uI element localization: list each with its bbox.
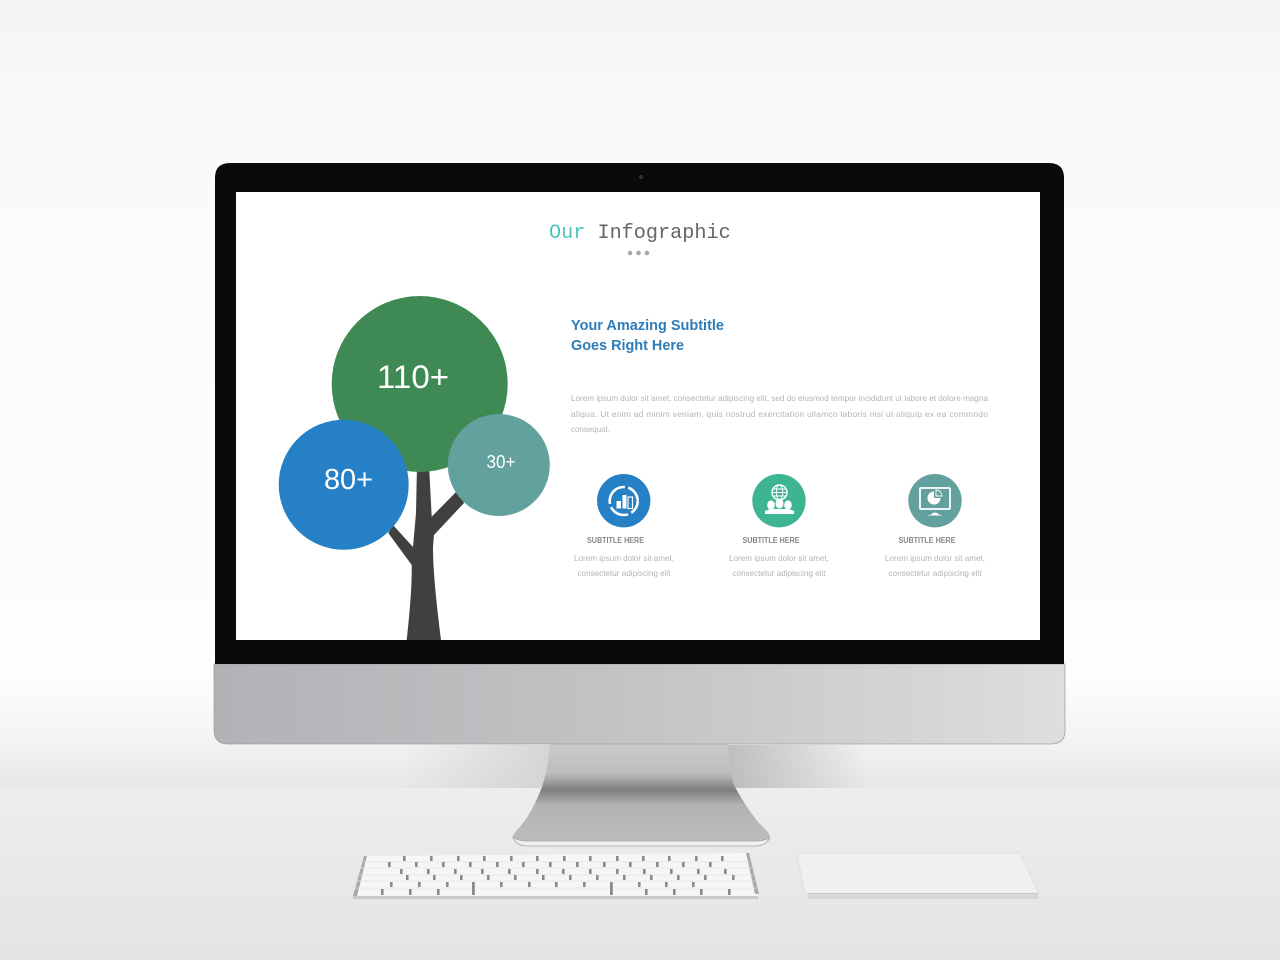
feature 3 text: Lorem ipsum dolor sit amet,: [885, 553, 985, 563]
feature 3 text: [885, 553, 985, 578]
body paragraph: aliqua. Ut enim ad minim veniam, quis nostrud exercitation ullamco laboris nisi ut aliquip ex ea commodo: [571, 409, 988, 419]
body paragraph: Lorem ipsum dolor sit amet, consectetur adipiscing elit, sed do eiusmod tempor incididunt ut labore et dolore magna: [571, 393, 988, 403]
feature 2 text: [729, 553, 829, 578]
subtitle heading: [571, 317, 724, 354]
circle: 80+: 80+: [324, 464, 373, 496]
feature 1 text: [574, 553, 674, 578]
feature 2 label: SUBTITLE HERE: [742, 536, 800, 545]
camera: [639, 175, 643, 179]
body paragraph: [571, 393, 988, 434]
feature 2 text: consectetur adipiscing elit: [732, 568, 826, 578]
feature 3 label: SUBTITLE HERE: [898, 536, 956, 545]
title dots: [628, 251, 649, 255]
feature 3 text: consectetur adipiscing elit: [888, 568, 982, 578]
monitor stand: [513, 744, 770, 846]
feature 2 text: Lorem ipsum dolor sit amet,: [729, 553, 829, 563]
keyboard: [353, 853, 759, 899]
subtitle heading: Goes Right Here: [571, 337, 684, 354]
feature 1 text: Lorem ipsum dolor sit amet,: [574, 553, 674, 563]
feature 3: [885, 474, 985, 578]
circle: 110+: [332, 296, 508, 472]
tree trunk: [388, 465, 464, 640]
monitor: [214, 163, 1065, 744]
body paragraph: consequat.: [571, 424, 610, 434]
tree chart: [279, 296, 550, 640]
feature 1: [574, 474, 674, 578]
trackpad: [797, 853, 1038, 899]
circle: 30+: 30+: [486, 452, 516, 472]
subtitle heading: Your Amazing Subtitle: [571, 317, 724, 334]
icon: monitor with pie chart: [908, 474, 962, 527]
monitor bezel: [215, 163, 1064, 664]
circle: 30+: [448, 414, 550, 516]
circle: 110+: 110+: [377, 359, 449, 395]
feature 1 label: SUBTITLE HERE: [587, 536, 645, 545]
feature 2: [729, 474, 829, 578]
title: Our Infographic: [549, 222, 731, 245]
feature 1 text: consectetur adipiscing elit: [578, 568, 671, 578]
screen: [236, 192, 1040, 640]
monitor chin: [214, 664, 1065, 744]
icon: chart in ring: [597, 474, 650, 527]
circle: 80+: [279, 420, 409, 550]
icon: people and globe: [752, 474, 806, 527]
